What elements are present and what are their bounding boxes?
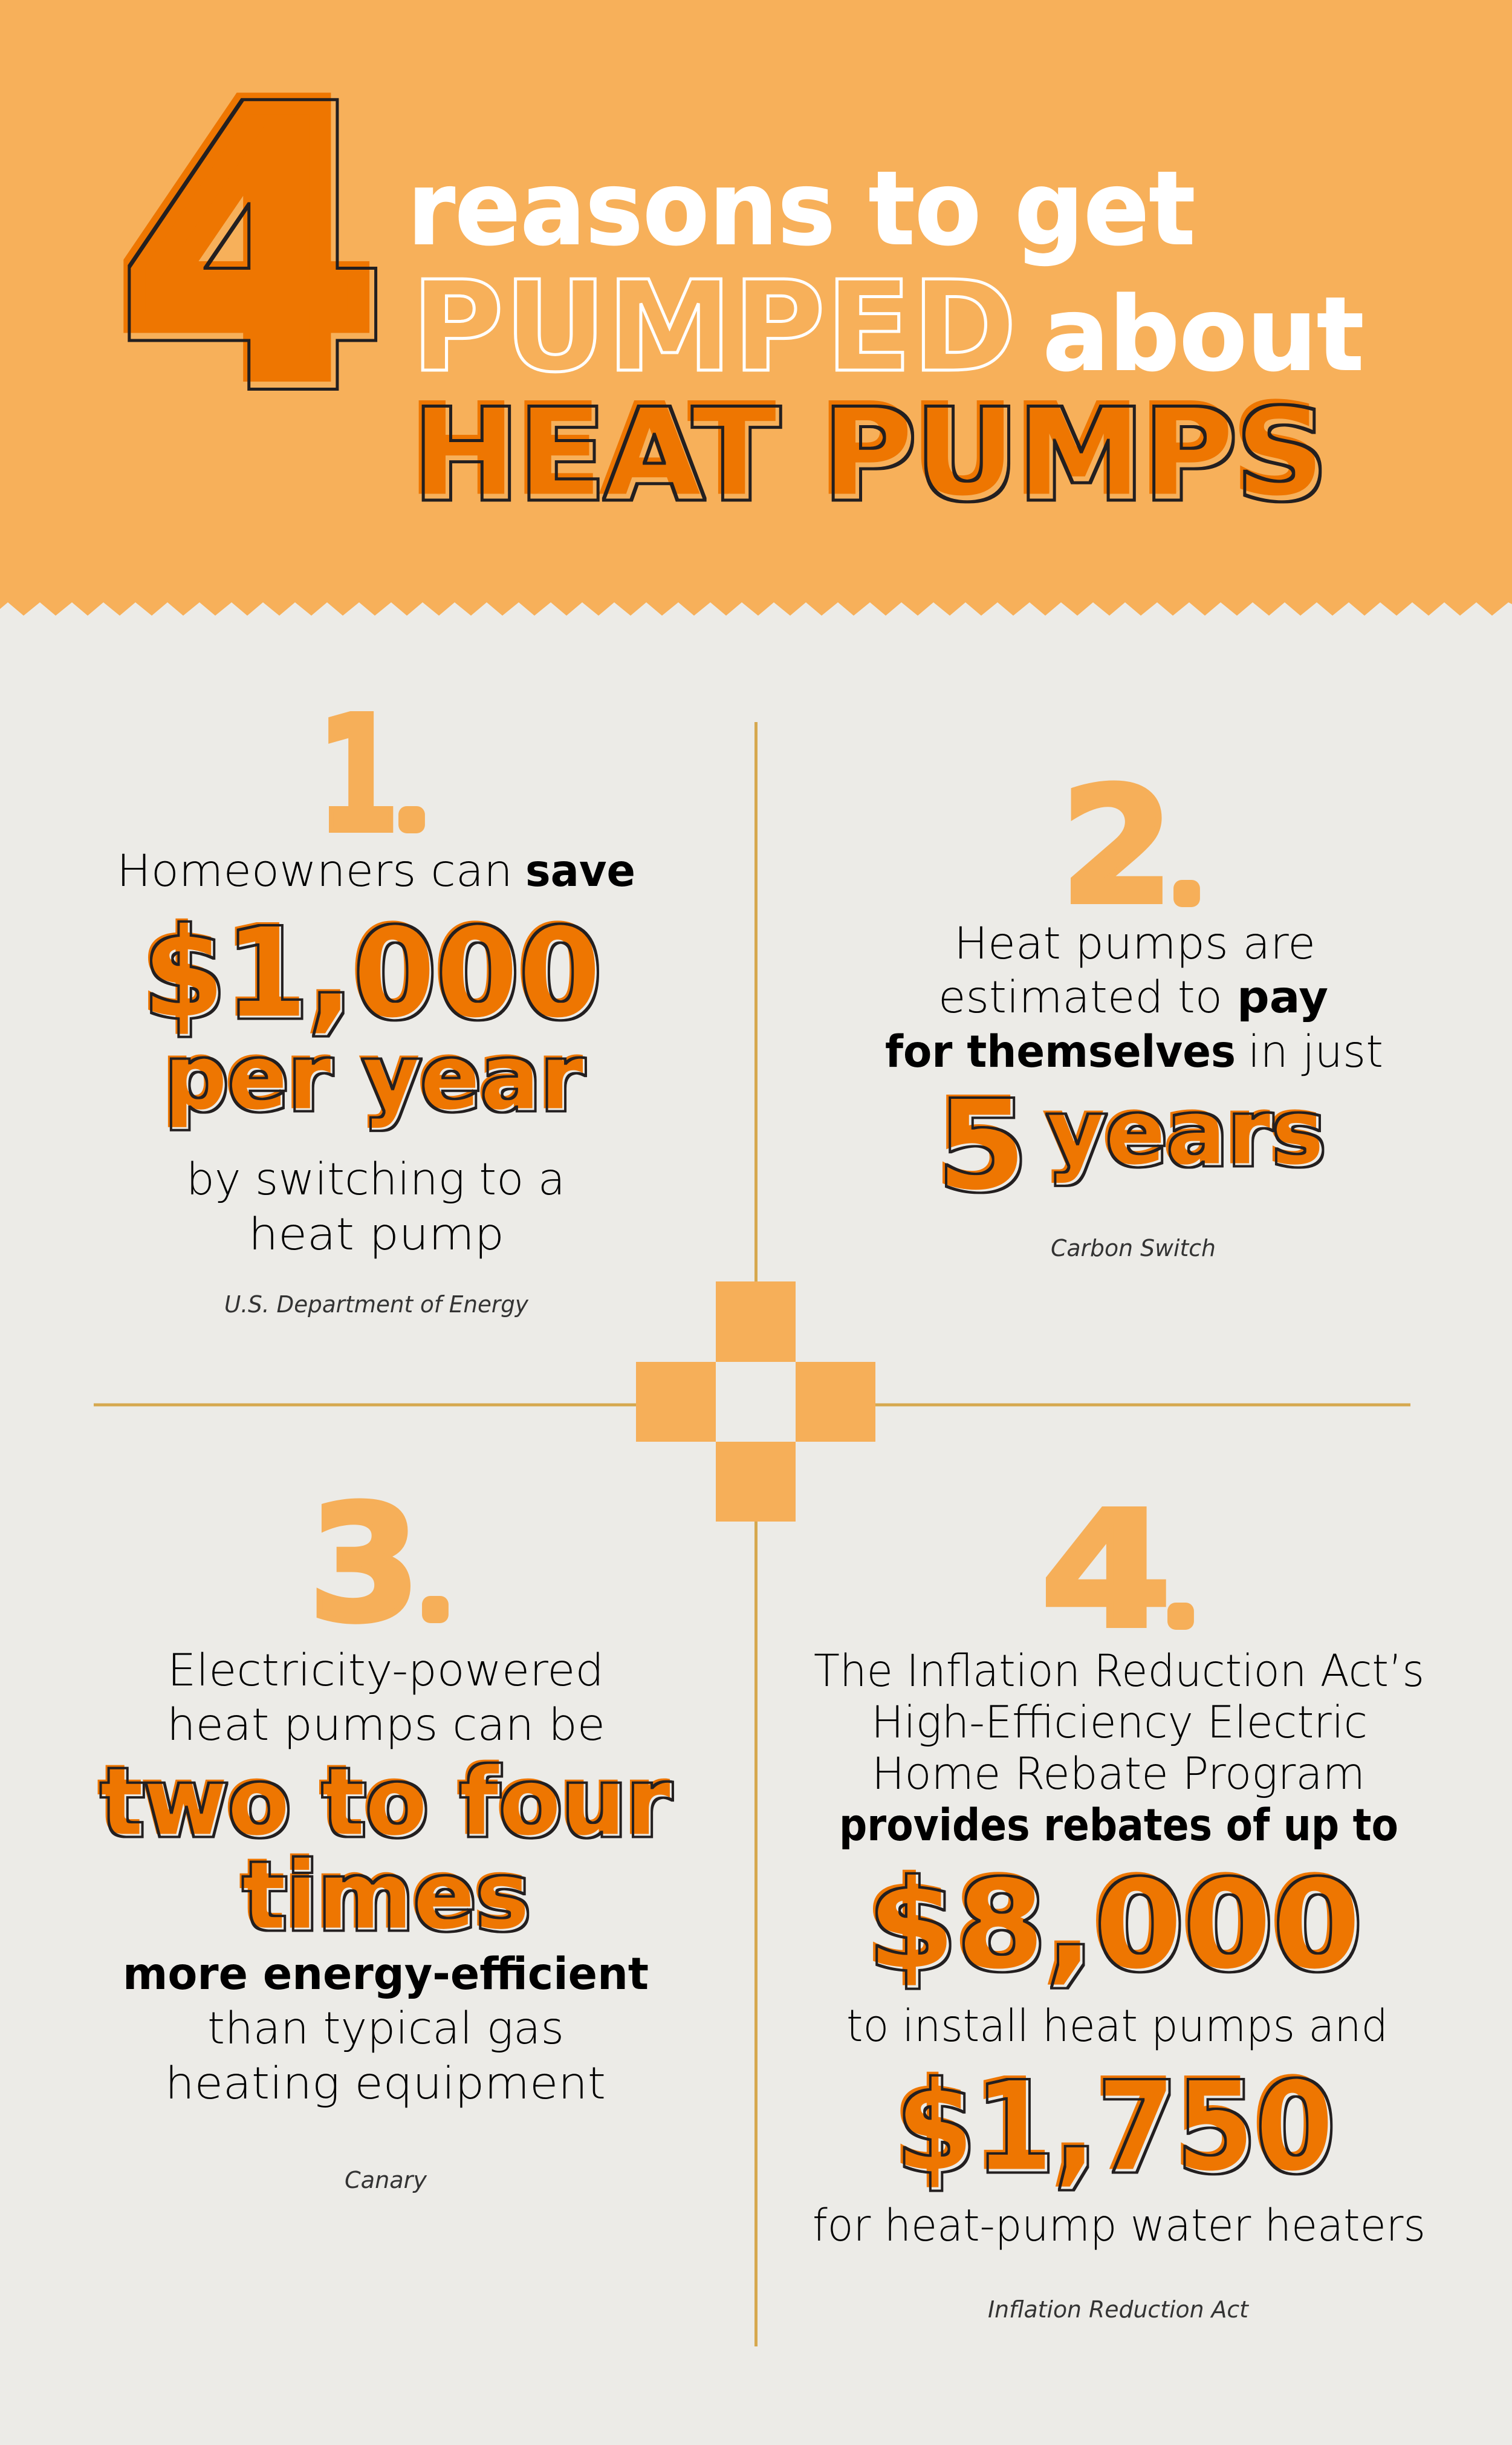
figure: 5 years: years [1048, 1081, 1326, 1187]
text: homeowners can save: save [525, 845, 635, 897]
figure: 5 years: 5 [938, 1075, 1028, 1219]
source: Inflation Reduction Act [988, 2296, 1250, 2323]
text: by switching to a heat pump [186, 1154, 565, 1260]
center cross ornament [636, 1281, 875, 1522]
numeral 1: . [401, 775, 422, 838]
text: electricity-powered heat pumps [167, 1645, 605, 1751]
source: Canary [345, 2167, 427, 2193]
text: more energy-efficient: more energy-efficient [123, 1949, 649, 2000]
text: than typical gas heating equipment: than typical gas [207, 2003, 564, 2054]
text: by switching to a heat pump: by switching to a [186, 1154, 565, 1205]
text: inflation reduction act [814, 1646, 1424, 1800]
figure: times: times [240, 1839, 528, 1949]
figure: $1,750: $1,750 [893, 2053, 1332, 2197]
numeral 1: 1 [317, 683, 399, 867]
text: by switching to a heat pump: heat pump [248, 1209, 504, 1260]
text: heat pumps pay for themselves: pay [1237, 972, 1328, 1023]
figure: two to four: two to four [101, 1748, 672, 1858]
text: inflation reduction act: High-Efficiency Electric [871, 1697, 1368, 1748]
text: heat pumps pay for themselves: estimated to [938, 972, 1222, 1023]
text: than typical gas heating equipment: heating equipment [165, 2058, 606, 2109]
figure: $8,000: $8,000 [865, 1851, 1359, 1995]
text: electricity-powered heat pumps: heat pumps can be [167, 1699, 605, 1751]
text: heat pumps pay for themselves: for themselves [885, 1026, 1236, 1078]
text: for heat-pump water heaters: for heat-pump water heaters [813, 2200, 1426, 2251]
panel: reason 3 [98, 1472, 672, 2193]
source: U.S. Department of Energy [224, 1291, 528, 1318]
text: inflation reduction act: Home Rebate Program [872, 1748, 1365, 1800]
figure: per year: per year [162, 1023, 582, 1128]
panel: reason 2 [885, 754, 1383, 1262]
figure: 5 years: 5 [934, 1072, 1025, 1216]
numeral 4: . [1170, 1571, 1191, 1635]
text: homeowners can save: Homeowners can [117, 845, 513, 897]
source: Carbon Switch [1051, 1235, 1216, 1262]
text: heat pumps pay for themselves: in just [1248, 1026, 1383, 1078]
figure: $1,750: $1,750 [897, 2057, 1335, 2201]
text: inflation reduction act: The Inflation Reduction Act’s [814, 1646, 1424, 1697]
big numeral 4: 4 [124, 37, 381, 464]
figure: $1,000: $1,000 [143, 903, 602, 1047]
title [118, 30, 1364, 528]
numeral 2: . [1176, 848, 1197, 912]
figure: 5 years: years [1044, 1078, 1322, 1183]
figure: per year: per year [165, 1026, 585, 1131]
numeral 3: 3 [309, 1472, 420, 1656]
panel: reason 1 [117, 683, 635, 1318]
text: than typical gas heating equipment [165, 2003, 606, 2109]
title line: reasons to get: reasons to get [407, 149, 1195, 268]
title word: PUMPED outlined: PUMPED [411, 254, 1017, 400]
text: electricity-powered heat pumps: Electricity-powered [167, 1645, 604, 1696]
title line: HEAT PUMPS: HEAT PUMPS [409, 378, 1323, 522]
text: heat pumps pay for themselves [885, 918, 1383, 1078]
header band with zigzag edge [0, 0, 1512, 616]
big numeral 4: 4 [118, 30, 375, 457]
figure: two to four: two to four [98, 1745, 669, 1855]
title word: about: about [1043, 275, 1364, 394]
numeral 4: 4 [1041, 1478, 1171, 1662]
figure: times: times [243, 1842, 531, 1952]
panel: reason 4 [813, 1478, 1426, 2323]
numeral 2: 2 [1061, 754, 1173, 939]
title line: HEAT PUMPS: HEAT PUMPS [414, 384, 1328, 528]
numeral 3: . [425, 1564, 446, 1628]
text: to install heat pumps and: to install heat pumps and [846, 2001, 1388, 2052]
figure: $8,000: $8,000 [868, 1855, 1363, 1999]
figure: 5 years [934, 1072, 1326, 1219]
divider lines [94, 722, 1410, 2346]
figure: $1,000: $1,000 [140, 900, 599, 1044]
text: provides rebates of up to: provides rebates of up to [839, 1800, 1398, 1851]
text: heat pumps pay for themselves: Heat pumps are [954, 918, 1316, 969]
